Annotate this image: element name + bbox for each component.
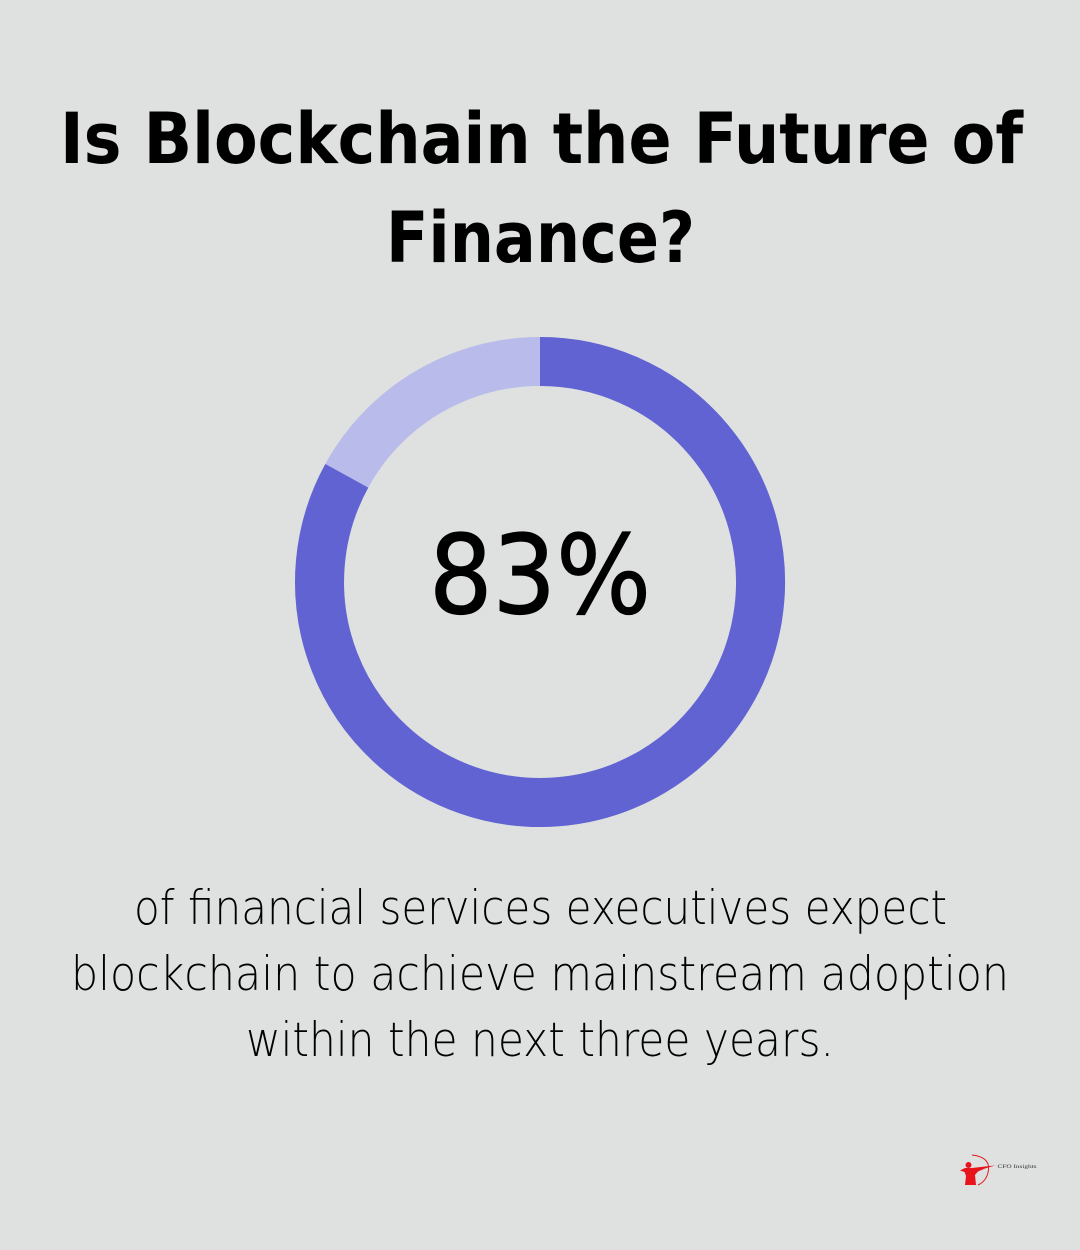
title: Finance? — [386, 197, 695, 279]
description text: within the next three years. — [246, 1013, 834, 1068]
donut chart: 83% — [320, 362, 761, 802]
logo wordmark: CFO Insights — [998, 1164, 1036, 1170]
description text: of financial services executives expect — [134, 881, 947, 936]
description text: blockchain to achieve mainstream adoption — [71, 947, 1009, 1002]
icon: archer bow — [960, 1155, 995, 1185]
title — [60, 98, 1024, 279]
logo: CFO Insights archer — [960, 1155, 1036, 1185]
big number: 83% — [429, 512, 651, 639]
description text — [71, 881, 1009, 1068]
